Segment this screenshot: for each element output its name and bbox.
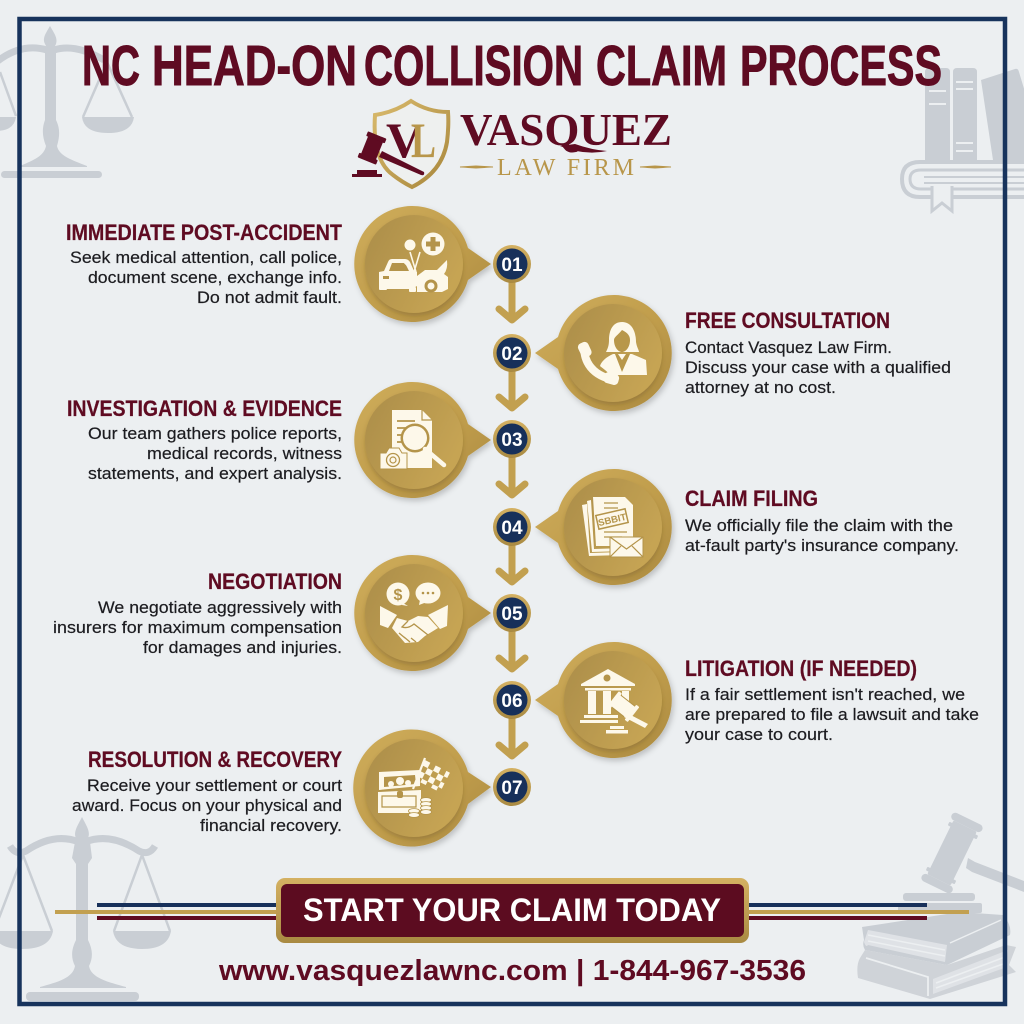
text: investigation and evidence: INVESTIGATION & EVIDENCE — [67, 396, 342, 421]
number 06 — [493, 681, 531, 719]
title — [82, 34, 942, 98]
icon: courthouse and gavel — [580, 669, 648, 734]
icon: car crash — [379, 232, 448, 292]
text: free consultation: Discuss your case with a qualified — [685, 358, 951, 377]
number 04 — [493, 508, 531, 546]
step 01 — [66, 206, 531, 322]
text: investigation and evidence — [67, 396, 342, 483]
title: NC — [82, 34, 140, 98]
text: resolution and recovery: RESOLUTION & RECOVERY — [88, 747, 342, 772]
number 06: 06 — [501, 691, 523, 712]
number 02 — [493, 334, 531, 372]
text: claim filing: CLAIM FILING — [685, 486, 818, 511]
icon: handshake with money and chat: $ — [394, 587, 403, 604]
watermark: scales bottom left — [0, 817, 171, 1001]
text: immediate post-accident: Seek medical attention, call police, — [70, 248, 342, 267]
bubble 02 — [535, 295, 672, 411]
number 01: 01 — [501, 255, 523, 276]
watermark: books top right — [902, 68, 1024, 211]
call-to-action banner: START YOUR CLAIM TODAY — [303, 892, 721, 928]
icon: attorney and phone — [577, 322, 647, 386]
text: negotiation: NEGOTIATION — [208, 569, 342, 594]
text: free consultation: attorney at no cost. — [685, 378, 836, 397]
number 01 — [493, 245, 531, 283]
number 07: 07 — [501, 778, 523, 799]
call-to-action banner — [276, 878, 749, 943]
text: claim filing — [685, 486, 959, 555]
text: litigation — [685, 656, 979, 744]
number 05 — [493, 594, 531, 632]
text: litigation: LITIGATION (IF NEEDED) — [685, 656, 917, 681]
bubble 05 — [354, 555, 491, 671]
step 04 — [493, 469, 959, 585]
icon: document magnifier camera — [380, 410, 444, 469]
watermark: gavel and books bottom right — [857, 811, 1024, 999]
icon: claim documents and envelope — [582, 497, 643, 557]
bubble 04 — [535, 469, 672, 585]
text: litigation: are prepared to file a lawsuit and take — [685, 705, 979, 724]
step 07 — [72, 730, 531, 846]
title: CLAIM — [596, 34, 727, 98]
text: immediate post-accident — [66, 220, 342, 307]
icon: shield with VL and gavel — [352, 101, 448, 187]
icon: shield with VL and gavel: L — [411, 112, 436, 168]
logo subtitle: LAW FIRM — [497, 155, 634, 181]
title: PROCESS — [740, 34, 942, 98]
text: negotiation: insurers for maximum compensation — [53, 618, 342, 637]
text: negotiation: We negotiate aggressively with — [98, 598, 342, 617]
text: resolution and recovery: financial recovery. — [200, 816, 342, 835]
text: litigation: If a fair settlement isn't reached, we — [685, 685, 965, 704]
bubble 06 — [535, 642, 672, 758]
number 02: 02 — [501, 344, 523, 365]
step 03 — [67, 382, 531, 498]
bubble 01 — [354, 206, 491, 322]
number 05: 05 — [501, 604, 523, 625]
banner side stripes — [55, 903, 969, 920]
text: investigation and evidence: medical records, witness — [147, 444, 342, 463]
text: resolution and recovery: Receive your settlement or court — [87, 776, 342, 795]
bubble 03 — [354, 382, 491, 498]
text: free consultation — [685, 308, 951, 397]
title: HEAD-ON — [152, 34, 357, 98]
icon: treasure chest, flag and coins — [378, 758, 450, 817]
text: free consultation: Contact Vasquez Law Firm. — [685, 338, 892, 357]
step 02 — [493, 295, 951, 411]
timeline arrows — [499, 280, 525, 756]
number 03 — [493, 420, 531, 458]
icon: handshake with money and chat — [380, 582, 448, 643]
step 06 — [493, 642, 979, 758]
text: resolution and recovery: award. Focus on your physical and — [72, 796, 342, 815]
icon: shield with VL and gavel: V — [386, 112, 422, 168]
text: negotiation — [53, 569, 342, 657]
step 05 — [53, 555, 531, 671]
number 03: 03 — [501, 430, 523, 451]
text: litigation: your case to court. — [685, 725, 833, 744]
bubble 07 — [353, 730, 491, 846]
logo wordmark: VASQUEZ — [460, 105, 672, 155]
title: COLLISION — [364, 34, 583, 98]
text: claim filing: We officially file the claim with the — [685, 516, 953, 535]
number 07 — [493, 768, 531, 806]
text: immediate post-accident: IMMEDIATE POST-ACCIDENT — [66, 220, 342, 245]
text: free consultation: FREE CONSULTATION — [685, 308, 890, 333]
text: investigation and evidence: statements, and expert analysis. — [88, 464, 342, 483]
text: investigation and evidence: Our team gathers police reports, — [88, 424, 342, 443]
contact line: www.vasquezlawnc.com | 1-844-967-3536 — [218, 955, 806, 987]
text: immediate post-accident: document scene, exchange info. — [88, 268, 342, 287]
text: claim filing: at-fault party's insurance company. — [685, 536, 959, 555]
number 04: 04 — [501, 518, 523, 539]
text: negotiation: for damages and injuries. — [143, 638, 342, 657]
text: resolution and recovery — [72, 747, 342, 835]
logo: Vasquez Law Firm — [352, 101, 672, 187]
watermark: scales top left — [0, 26, 134, 178]
icon: claim documents and envelope: SBBIT — [597, 512, 628, 529]
text: immediate post-accident: Do not admit fault. — [197, 288, 342, 307]
